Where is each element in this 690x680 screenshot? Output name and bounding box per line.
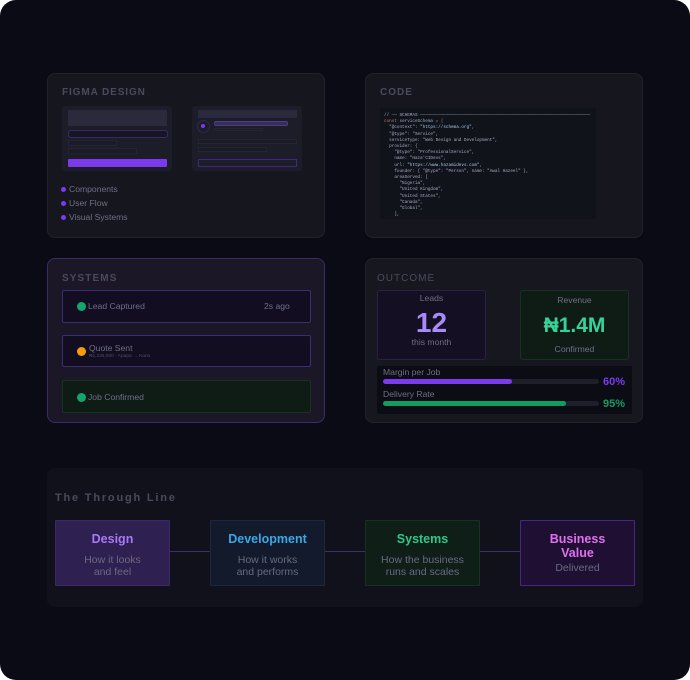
metric card: leads: 12 [416, 306, 447, 338]
progress: delivery rate [383, 388, 625, 410]
list: deliverables: Visual Systems [69, 212, 128, 222]
heading: code: CODE [380, 87, 413, 98]
status dot: amber [76, 347, 86, 356]
metric card: revenue [520, 290, 629, 360]
heading: figma design: FIGMA DESIGN [62, 87, 146, 98]
metric card: revenue: Revenue [557, 295, 592, 305]
event row: job confirmed [62, 380, 311, 413]
step: design [55, 520, 170, 586]
event row: lead captured [62, 290, 311, 322]
event row: job confirmed: Job Confirmed [88, 392, 144, 402]
connector: systems to business value [480, 550, 520, 552]
heading: outcome: OUTCOME [377, 272, 435, 284]
progress: delivery rate: 95% [603, 398, 625, 410]
panel: systems [47, 258, 325, 422]
step: development: and performs [237, 566, 298, 578]
heading: systems: SYSTEMS [62, 272, 118, 284]
progress panel [377, 366, 632, 414]
heading: the through line: The Through Line [55, 492, 177, 504]
progress: margin per job: 60% [603, 376, 625, 388]
step: development: How it works [238, 554, 297, 566]
event row: quote sent [62, 335, 311, 367]
metric card: revenue: ₦1.4M [544, 314, 605, 336]
step: business value: Business [550, 532, 605, 546]
connector: development to systems [325, 550, 365, 552]
step: systems: How the business [381, 554, 464, 566]
code block: // ── SCHEMAS ────────────────────────────────────────────────────────────────── const serviceSchema = { "@context": "https://schema.org", "@type": "Service", serviceType: "Web Design and Development", provider: { "@type": "ProfessionalService", name: "Haza'CIDevs", url: "https://www.hazamidevs.com", founder: { "@type": "Person", name: "Awal Hazeel" }, areaServed: [ "Nigeria", "United Kingdom", "United States", "Canada", "Global", ], [384, 113, 590, 217]
metric card: revenue: Confirmed [555, 344, 594, 354]
connector: design to development [170, 550, 210, 552]
progress: margin per job: Margin per Job [383, 366, 440, 376]
event row: quote sent: ₦1,235,000 · Apapa → Kano [89, 354, 150, 359]
list: deliverables [61, 184, 128, 222]
metric card: leads [377, 290, 486, 360]
step: design: How it looks [84, 554, 141, 566]
step: business value: Value [561, 546, 594, 560]
step: business value [520, 520, 635, 586]
wireframe: form mockup [62, 106, 172, 171]
panel: figma design [47, 73, 325, 238]
step: design: and feel [94, 566, 131, 578]
step: development [210, 520, 325, 586]
step: systems: runs and scales [386, 566, 459, 578]
step: business value: Delivered [555, 562, 600, 574]
progress: delivery rate: Delivery Rate [383, 388, 435, 398]
event row: lead captured: Lead Captured [88, 301, 145, 311]
step: systems [365, 520, 480, 586]
event row: quote sent: Quote Sent [89, 343, 132, 353]
metric card: leads: Leads [420, 293, 443, 303]
panel: code [365, 73, 643, 238]
step: development: Development [228, 532, 307, 546]
status dot: green [76, 392, 86, 402]
wireframe: profile mockup [192, 106, 302, 171]
step: design: Design [92, 532, 133, 546]
status dot: green [76, 302, 86, 311]
progress: margin per job [383, 366, 625, 388]
list: deliverables: Components [69, 184, 118, 194]
metric card: leads: this month [412, 337, 451, 347]
list: deliverables: User Flow [69, 198, 108, 208]
event row: lead captured: 2s ago [264, 301, 290, 311]
panel: the through line [47, 468, 643, 607]
step: systems: Systems [397, 532, 448, 546]
panel: outcome [365, 258, 643, 422]
